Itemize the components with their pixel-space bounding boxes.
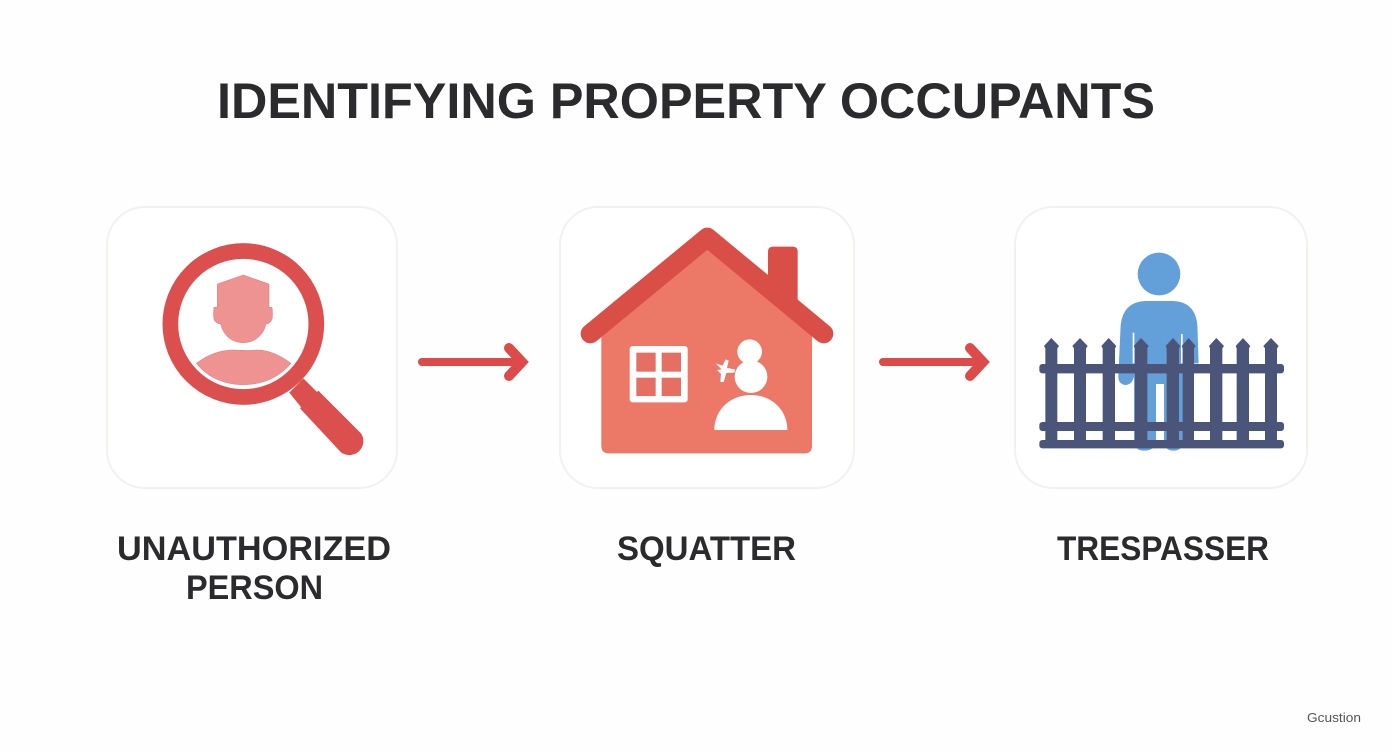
house body xyxy=(601,243,812,453)
label: unauthorized person xyxy=(117,530,391,607)
watermark: Gcustion xyxy=(1307,710,1361,725)
squatter figure xyxy=(714,339,787,430)
icon: magnifying glass with person xyxy=(170,251,363,455)
panel card: trespasser xyxy=(1015,207,1307,488)
panel card: unauthorized person xyxy=(107,207,397,488)
panel: trespasser xyxy=(1015,207,1307,488)
fence xyxy=(1039,338,1284,448)
magnifier ring xyxy=(170,251,316,397)
label: unauthorized person: UNAUTHORIZED xyxy=(117,530,391,568)
panel card: squatter xyxy=(560,207,854,488)
person shoulders xyxy=(196,350,291,385)
chimney xyxy=(768,247,798,307)
panel: squatter xyxy=(560,207,854,488)
magnifier neck xyxy=(289,378,320,410)
arrow: squatter to trespasser xyxy=(883,348,983,376)
label: squatter: SQUATTER xyxy=(617,530,796,568)
label: trespasser: TRESPASSER xyxy=(1057,530,1269,568)
label: unauthorized person: PERSON xyxy=(186,569,323,607)
person xyxy=(1118,253,1199,451)
icon: person behind fence xyxy=(1039,253,1284,451)
roof xyxy=(590,237,824,334)
icon: house with squatter xyxy=(590,237,824,453)
magnifier grip xyxy=(300,391,363,455)
arrow: unauthorized person to squatter xyxy=(422,348,522,376)
window xyxy=(630,346,688,402)
person head xyxy=(213,275,272,343)
panel: unauthorized person xyxy=(107,207,397,488)
title: IDENTIFYING PROPERTY OCCUPANTS xyxy=(217,73,1155,129)
